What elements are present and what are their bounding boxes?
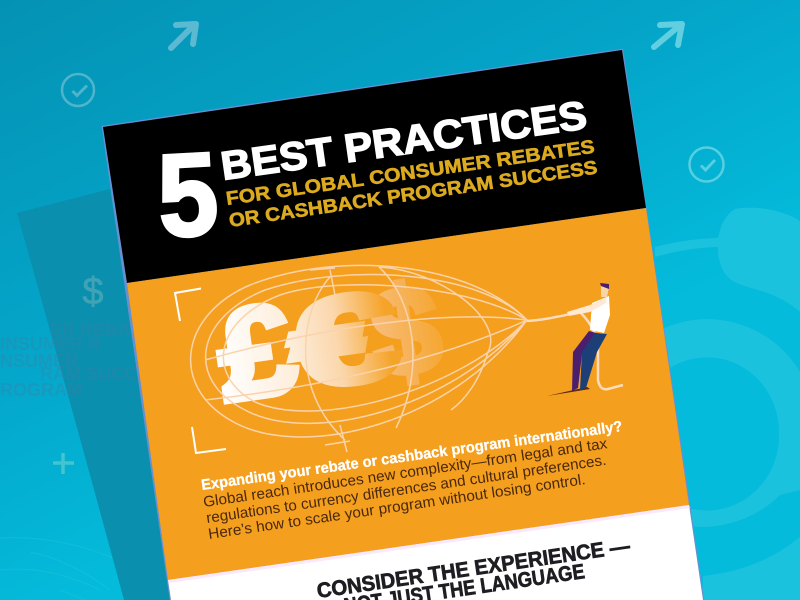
faint ghost text on left: ER REBATES <box>50 320 165 340</box>
left leg <box>572 331 600 391</box>
number five: 5 <box>154 128 221 263</box>
icon: left arrow <box>171 24 196 48</box>
icon: left check circle <box>62 74 94 106</box>
dollar symbol: $ <box>363 259 449 405</box>
icon: dollar sign: $ <box>82 271 104 313</box>
hair <box>600 283 609 289</box>
corner bracket bottom <box>192 427 226 453</box>
poster shadow <box>17 189 172 600</box>
rope <box>527 312 623 389</box>
panel: white section <box>168 505 703 600</box>
faint ghost text on left: ROGRAM <box>0 380 82 400</box>
background ring and blob shapes <box>655 208 800 600</box>
intro body line 1: Global reach introduces new complexity—from legal and tax <box>202 435 609 511</box>
faint ghost text on left: RAM SUCCESS <box>40 364 173 384</box>
icon: right check circle <box>690 148 724 182</box>
faint ghost text on left <box>0 320 173 400</box>
panel: orange hero <box>127 208 689 580</box>
intro body line 3: Here’s how to scale your program without losing control. <box>207 471 587 543</box>
heading: best practices: BEST PRACTICES <box>218 93 590 189</box>
arm <box>567 297 607 316</box>
icon: right arrow <box>654 24 682 47</box>
faint ghost text on left: NSUMER <box>0 351 78 371</box>
subheading line 1: FOR GLOBAL CONSUMER REBATES <box>225 137 596 210</box>
ground shadow <box>547 387 590 396</box>
intro bold line: Expanding your rebate or cashback program internationally? <box>200 418 623 494</box>
poster edge <box>103 50 703 600</box>
globe wireframe <box>191 265 527 452</box>
corner bracket top <box>175 288 201 321</box>
intro body line 2: regulations to currency differences and cultural preferences. <box>205 452 607 527</box>
euro symbol: € <box>281 265 407 417</box>
subheading line 2: OR CASHBACK PROGRAM SUCCESS <box>228 157 599 232</box>
background faint arcs <box>0 538 118 600</box>
head <box>601 284 609 297</box>
pound symbol: £ <box>209 277 304 429</box>
faint ghost text on left: INSUMER R <box>0 334 101 354</box>
panel: black header <box>103 50 646 283</box>
icon: plus <box>53 453 74 474</box>
figure pulling rope <box>527 283 623 396</box>
right leg <box>580 333 607 390</box>
shirt <box>590 296 610 333</box>
